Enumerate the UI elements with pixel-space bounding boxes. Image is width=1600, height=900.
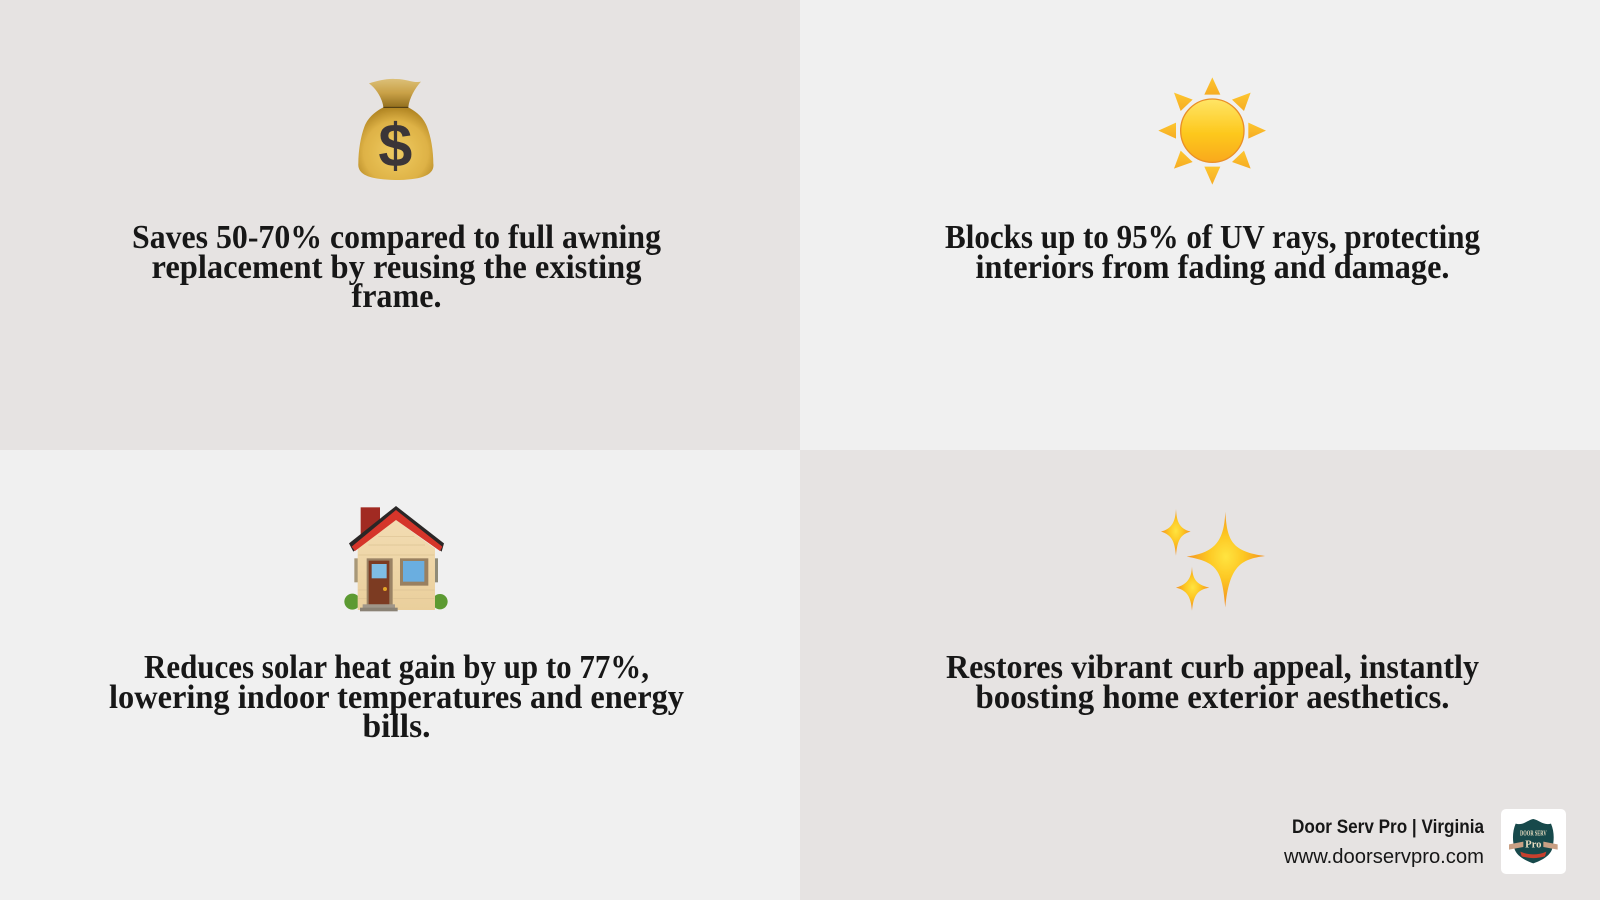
text: savings: frame. <box>352 278 442 315</box>
text: savings <box>132 219 661 315</box>
text: UV protection: Blocks up to 95% of UV rays, protecting <box>945 219 1480 256</box>
text: company name and website <box>1283 817 1484 868</box>
text: energy <box>109 649 684 745</box>
icon: house <box>344 506 448 611</box>
text: company name and website: www.doorservpro.com <box>1283 846 1484 868</box>
text: energy: bills. <box>362 708 430 745</box>
icon: money bag <box>358 79 433 180</box>
panel: savings <box>0 0 800 450</box>
icon: sparkles <box>1161 509 1265 611</box>
text: savings: replacement by reusing the existing <box>152 249 642 286</box>
text: curb appeal: boosting home exterior aesthetics. <box>976 679 1450 716</box>
text: curb appeal: Restores vibrant curb appeal, instantly <box>946 649 1479 686</box>
text: energy: Reduces solar heat gain by up to 77%, <box>144 649 649 686</box>
icon: money bag: $ <box>378 112 412 180</box>
text: savings: Saves 50-70% compared to full awning <box>132 219 661 256</box>
logo badge <box>1501 809 1566 874</box>
panel: curb appeal <box>800 450 1600 900</box>
logo badge: DOOR SERV <box>1520 829 1547 838</box>
panel: energy <box>0 450 800 900</box>
text: company name and website: Door Serv Pro | Virginia <box>1292 817 1484 838</box>
text: UV protection: interiors from fading and damage. <box>976 249 1450 286</box>
text: energy: lowering indoor temperatures and energy <box>109 679 684 716</box>
text: UV protection <box>945 219 1480 286</box>
text: curb appeal <box>946 649 1479 716</box>
icon: sun <box>1158 77 1266 185</box>
panel: UV protection <box>800 0 1600 450</box>
logo badge: Pro <box>1525 840 1542 851</box>
